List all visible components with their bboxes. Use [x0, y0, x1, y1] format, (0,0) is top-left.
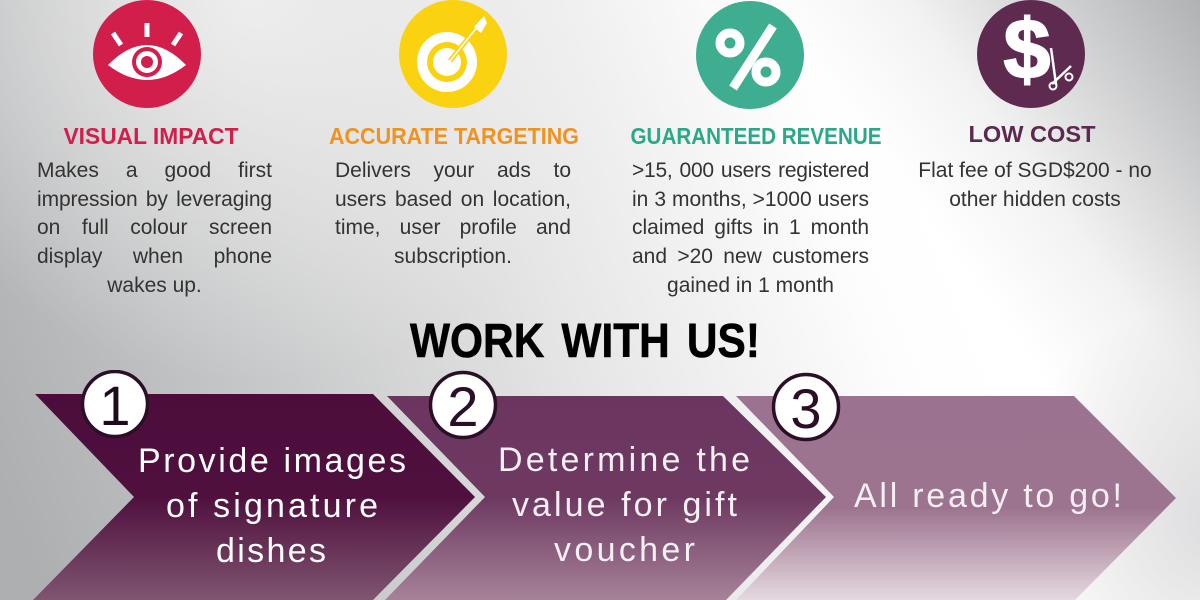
panel: low cost	[918, 0, 1152, 211]
text: visual impact description: Makes a good first	[37, 159, 272, 182]
text: accurate targeting description: time, user profile and	[335, 216, 571, 239]
panel: accurate targeting	[329, 0, 579, 268]
text: guaranteed revenue description: in 3 months, >1000 users	[632, 188, 869, 211]
text: accurate targeting description: subscription.	[394, 245, 512, 268]
icon: dollar and scissors	[977, 0, 1085, 108]
text: low cost description: Flat fee of SGD$200 - no	[918, 159, 1152, 182]
step 2 arrow	[385, 396, 826, 600]
text: low cost description	[918, 159, 1152, 211]
badge 1	[82, 372, 148, 437]
step 2 arrow: value for gift	[512, 486, 738, 524]
icon: percent	[696, 1, 804, 109]
icon: eye	[93, 0, 201, 108]
heading: accurate targeting: ACCURATE TARGETING	[329, 123, 579, 149]
text: accurate targeting description	[335, 159, 571, 268]
badge 3: 3	[790, 377, 822, 440]
process arrows	[33, 370, 1176, 600]
text: guaranteed revenue description: claimed gifts in 1 month	[632, 216, 869, 239]
badge 2	[430, 372, 496, 438]
text: guaranteed revenue description: >15, 000 users registered	[632, 159, 869, 182]
text: low cost description: other hidden costs	[949, 188, 1121, 211]
badge 1: 1	[99, 374, 131, 437]
panel: guaranteed revenue	[630, 1, 882, 297]
text: visual impact description: display when phone	[37, 245, 272, 268]
text: accurate targeting description: Delivers your ads to	[335, 159, 571, 182]
step 1 arrow: of signature	[166, 487, 378, 525]
step 1 arrow: dishes	[216, 532, 326, 570]
step 3 arrow	[736, 396, 1176, 600]
text: visual impact description	[37, 159, 272, 297]
text: accurate targeting description: users based on location,	[335, 188, 571, 211]
heading: low cost: LOW COST	[968, 121, 1096, 147]
text: guaranteed revenue description: and >20 new customers	[632, 245, 869, 268]
text: guaranteed revenue description: gained in 1 month	[667, 274, 834, 297]
step 2 arrow: voucher	[554, 531, 695, 569]
badge 2: 2	[447, 375, 479, 438]
panel: visual impact	[37, 0, 272, 297]
text: visual impact description: impression by leveraging	[37, 188, 272, 211]
text: guaranteed revenue description	[632, 159, 869, 297]
text: visual impact description: wakes up.	[107, 274, 202, 297]
step 2 arrow: Determine the	[498, 441, 750, 479]
icon: target	[399, 0, 507, 108]
text: visual impact description: on full colour screen	[37, 216, 272, 239]
step 1 arrow	[33, 394, 475, 600]
icon: dollar and scissors: $	[1004, 2, 1050, 96]
badge 3	[774, 374, 838, 440]
step 1 arrow: Provide images	[138, 442, 406, 480]
heading: visual impact: VISUAL IMPACT	[64, 123, 238, 149]
step 3 arrow: All ready to go!	[854, 477, 1122, 515]
